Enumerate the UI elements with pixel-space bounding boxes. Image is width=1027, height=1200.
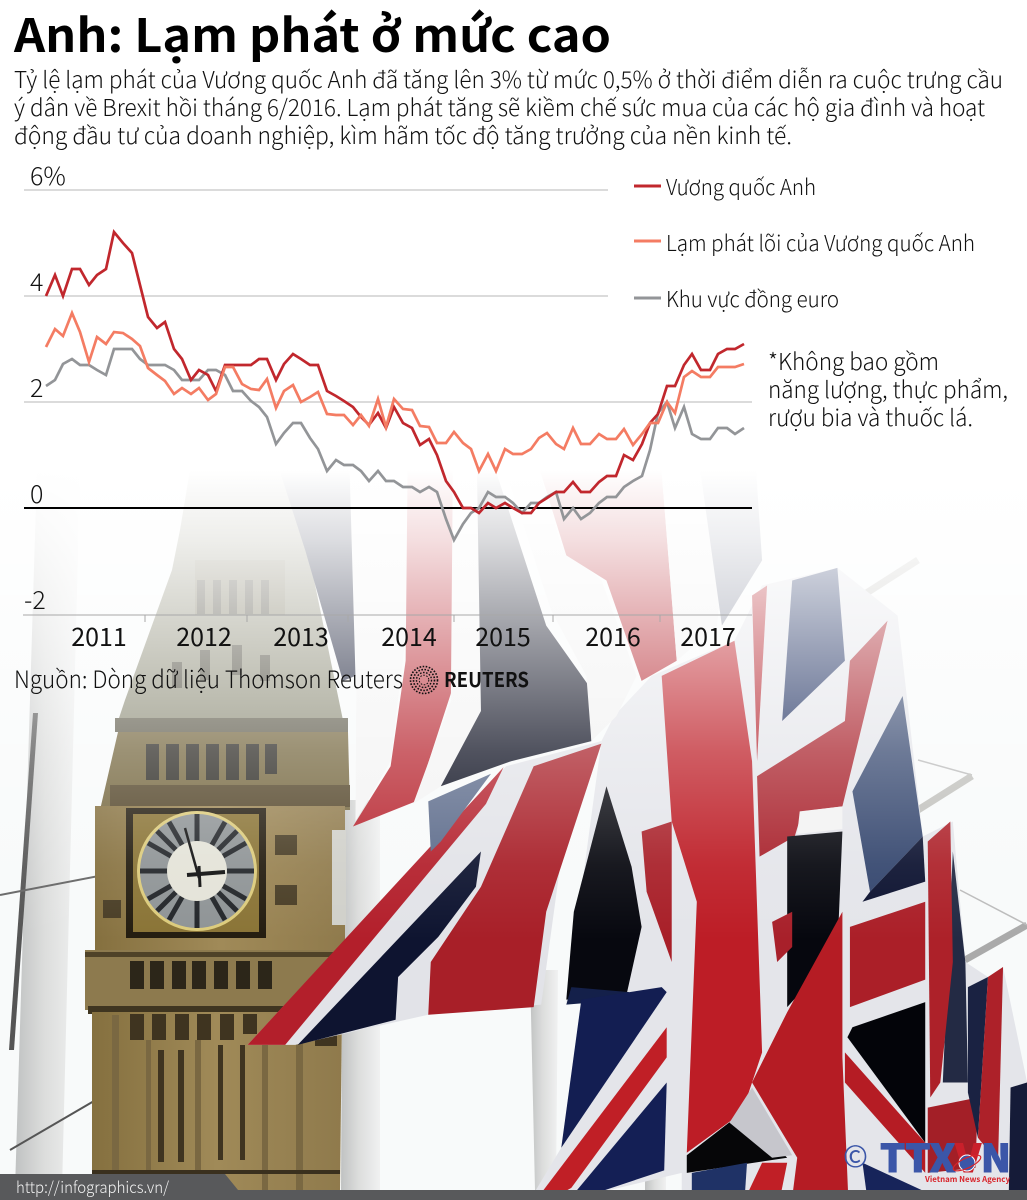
footer url: http://infographics.vn/ <box>16 1174 170 1198</box>
tower balconies <box>85 950 347 1010</box>
y axis labels: 4 <box>30 263 43 299</box>
source: Nguồn: Dòng dữ liệu Thomson Reuters <box>14 660 403 695</box>
footnote <box>768 343 1008 433</box>
title: Anh: Lạm phát ở mức cao <box>13 0 611 66</box>
globe emblem <box>951 1152 983 1174</box>
line chart <box>23 157 1008 654</box>
intro text: động đầu tư của doanh nghiệp, kìm hãm tốc độ tăng trưởng của nền kinh tế. <box>14 117 792 151</box>
right flags <box>928 821 1027 1200</box>
x axis labels: 2017 <box>680 618 736 654</box>
y axis labels: 0 <box>30 475 43 511</box>
x axis labels <box>71 618 736 654</box>
clock stage <box>95 806 345 952</box>
y axis labels: 6% <box>30 157 66 193</box>
long diagonal flag <box>248 741 642 1045</box>
belfry <box>100 732 350 810</box>
Reuters logo: REUTERS <box>444 664 529 693</box>
Big Ben tower <box>85 470 350 1190</box>
upper hanging flag <box>260 410 762 826</box>
Union flags <box>248 410 1027 1200</box>
legend: Lạm phát lõi của Vương quốc Anh <box>666 226 975 258</box>
x axis labels: 2012 <box>176 618 232 654</box>
y axis labels: 2 <box>30 369 43 405</box>
clock face <box>137 811 257 931</box>
x axis labels: 2013 <box>273 618 329 654</box>
Reuters logo <box>410 664 529 694</box>
fabric silhouette <box>524 568 1027 1200</box>
TTXVN logo: TTXVN <box>880 1128 1011 1183</box>
Reuters dotted globe <box>410 666 438 694</box>
TTXVN logo: © <box>843 1132 868 1176</box>
tower roof <box>115 470 345 730</box>
legend: Khu vực đồng euro <box>666 282 839 314</box>
x axis labels: 2015 <box>475 618 531 654</box>
central vertical flag <box>642 568 928 1200</box>
x axis labels: 2016 <box>585 618 641 654</box>
tower shaft <box>92 1012 342 1190</box>
white fade over photo <box>0 0 1027 940</box>
flagpoles <box>0 470 1027 1190</box>
gridlines <box>24 190 752 402</box>
sky <box>0 470 1027 1200</box>
y axis labels <box>24 157 66 617</box>
footnote: năng lượng, thực phẩm, <box>768 371 1008 405</box>
lower left flag <box>526 987 792 1200</box>
x axis labels: 2011 <box>71 618 127 654</box>
intro text: ý dân về Brexit hồi tháng 6/2016. Lạm phát tăng sẽ kiềm chế sức mua của các hộ gia đình và hoạt <box>14 89 985 123</box>
y axis labels: -2 <box>24 581 46 617</box>
footnote: rượu bia và thuốc lá. <box>768 399 973 433</box>
x axis labels: 2014 <box>381 618 437 654</box>
series: euro zone <box>46 349 744 540</box>
background photo: Big Ben and Union flags <box>0 410 1027 1200</box>
legend <box>634 170 975 314</box>
series: UK core inflation <box>46 313 744 471</box>
intro text <box>14 61 1003 151</box>
footnote: *Không bao gồm <box>768 343 939 377</box>
footer bar <box>0 1174 1027 1200</box>
intro text: Tỷ lệ lạm phát của Vương quốc Anh đã tăng lên 3% từ mức 0,5% ở thời điểm diễn ra cuộc trưng cầu <box>14 61 1003 95</box>
series: UK <box>46 232 744 513</box>
TTXVN logo: Vietnam News Agency <box>924 1174 1010 1185</box>
legend: Vương quốc Anh <box>666 170 816 202</box>
